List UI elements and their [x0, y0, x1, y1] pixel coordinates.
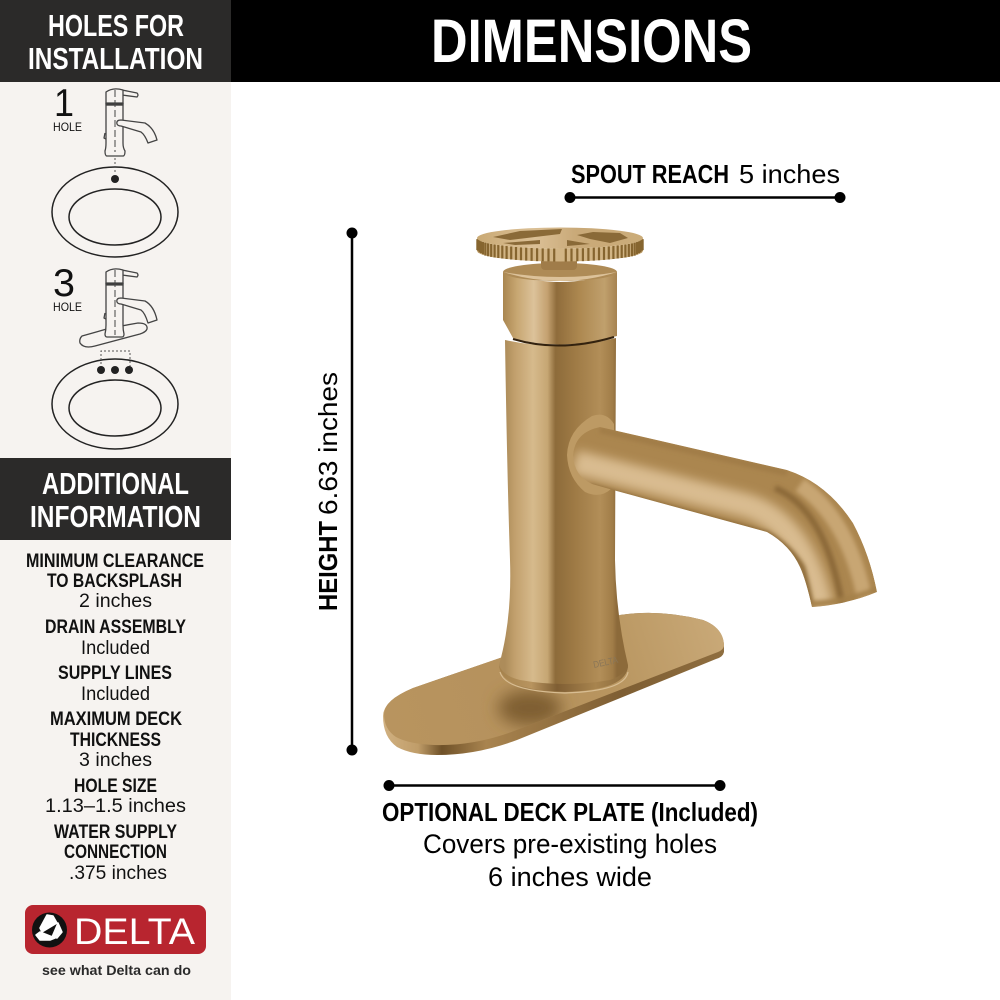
spec: supply lines: Included — [81, 684, 150, 705]
panel: holes for installation heading: INSTALLATION — [28, 41, 203, 76]
logo: delta: see what Delta can do — [42, 962, 191, 978]
callout: optional deck plate: OPTIONAL DECK PLATE (Included) — [382, 797, 758, 827]
panel: dimensions header bar — [231, 0, 1000, 82]
label: 3 hole — [53, 262, 82, 314]
illustration: faucet — [383, 228, 878, 755]
callout: height: 6.63 inches — [313, 372, 343, 515]
panel: additional information heading — [0, 458, 231, 540]
callout: spout reach: SPOUT REACH — [571, 159, 729, 189]
panel: one hole diagram — [52, 82, 178, 257]
spec: minimum clearance: TO BACKSPLASH — [47, 571, 182, 592]
spec: minimum clearance — [26, 551, 204, 612]
label: 1 hole: HOLE — [53, 120, 82, 134]
spout collar — [567, 415, 615, 495]
cap — [503, 263, 617, 346]
title: dimensions: DIMENSIONS — [431, 7, 752, 75]
spec: drain assembly: DRAIN ASSEMBLY — [45, 617, 186, 638]
spec: maximum deck thickness — [50, 709, 182, 771]
spec: maximum deck thickness: MAXIMUM DECK — [50, 709, 182, 730]
callout: optional deck plate: 6 inches wide — [488, 862, 652, 892]
stem — [541, 255, 577, 270]
panel: holes for installation heading — [0, 0, 231, 82]
spec: drain assembly: Included — [81, 638, 150, 659]
spout — [573, 427, 878, 610]
icon: three hole sink — [52, 351, 178, 449]
body — [499, 338, 628, 693]
callout: optional deck plate: Covers pre-existing holes — [423, 829, 717, 859]
logo: delta — [25, 905, 206, 978]
panel: holes for installation heading: HOLES FOR — [48, 8, 184, 43]
body: DELTA — [592, 655, 620, 671]
panel: three hole diagram — [52, 262, 178, 449]
icon: single hole faucet — [104, 89, 157, 156]
spec: water supply connection: CONNECTION — [64, 842, 167, 863]
label: 3 hole: 3 — [53, 262, 75, 305]
spec: maximum deck thickness: 3 inches — [79, 750, 152, 771]
logo: delta: DELTA — [74, 911, 195, 952]
callout: spout reach — [564, 159, 846, 203]
handle wheel — [477, 228, 643, 262]
spec: water supply connection: .375 inches — [69, 863, 167, 884]
spec: minimum clearance: MINIMUM CLEARANCE — [26, 551, 204, 572]
text block: additional information list — [26, 551, 204, 884]
spec: minimum clearance: 2 inches — [79, 591, 152, 612]
spec: hole size: HOLE SIZE — [74, 776, 157, 797]
label: 1 hole: 1 — [54, 82, 74, 125]
label: 3 hole: HOLE — [53, 300, 82, 314]
callout: optional deck plate — [382, 780, 758, 892]
panel: additional information heading: INFORMATION — [30, 499, 201, 534]
spec: maximum deck thickness: THICKNESS — [70, 730, 161, 751]
spec: drain assembly — [45, 617, 186, 659]
spec: water supply connection: WATER SUPPLY — [54, 822, 177, 843]
spec: water supply connection — [54, 822, 177, 884]
label: 1 hole — [53, 82, 82, 134]
panel: additional information heading: ADDITIONAL — [42, 466, 189, 501]
spec: supply lines: SUPPLY LINES — [58, 663, 172, 684]
icon: three hole faucet with deck plate — [80, 269, 157, 347]
callout: height: HEIGHT — [313, 521, 343, 611]
callout: spout reach: 5 inches — [739, 159, 840, 189]
panel: sidebar background — [0, 0, 231, 1000]
spec: hole size — [45, 776, 186, 817]
spec: supply lines — [58, 663, 172, 705]
spec: hole size: 1.13–1.5 inches — [45, 796, 186, 817]
callout: height — [313, 228, 358, 756]
deck plate — [383, 613, 724, 755]
icon: single hole sink — [52, 158, 178, 257]
